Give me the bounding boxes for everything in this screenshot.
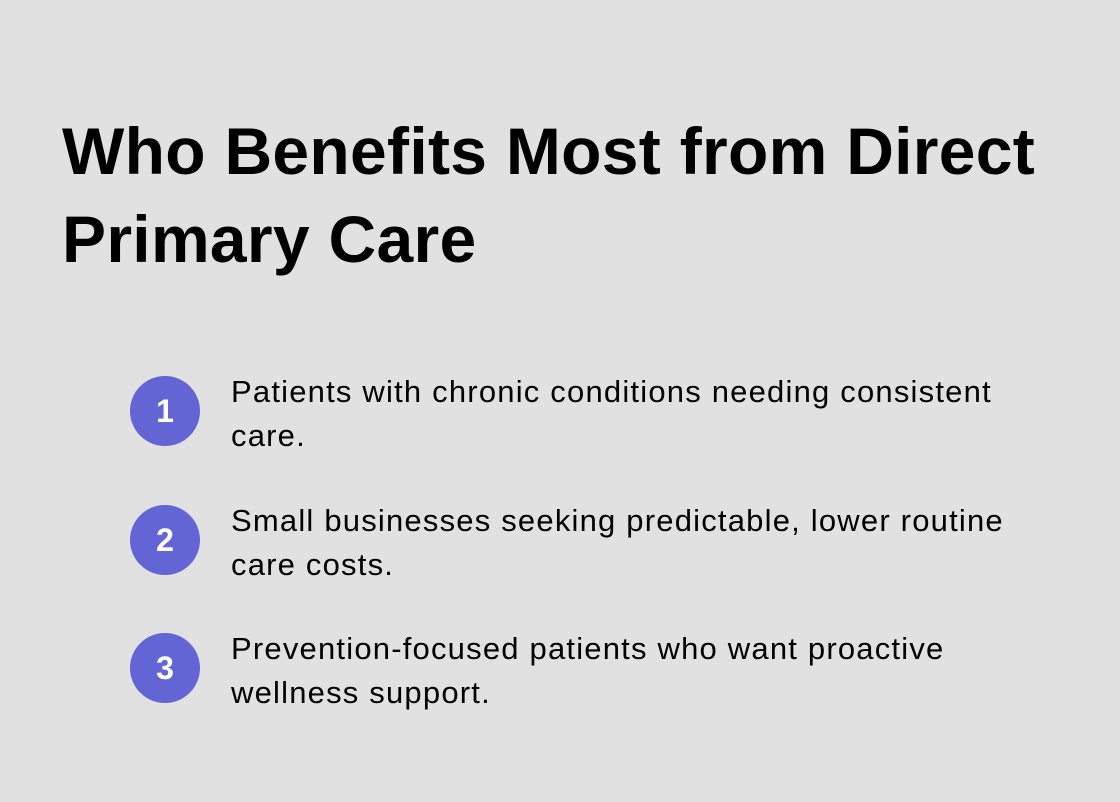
text 2: Small businesses seeking predictable, lower routine	[231, 503, 1004, 538]
title	[62, 114, 1035, 276]
item 1	[130, 374, 992, 453]
text 1: care.	[231, 418, 306, 453]
text 3: wellness support.	[231, 675, 491, 710]
icon: number 3	[130, 633, 200, 703]
item 3	[130, 631, 944, 710]
icon: number 1	[130, 376, 200, 446]
text 3	[231, 631, 944, 710]
icon: number 2: 2	[156, 522, 174, 558]
icon: number 3: 3	[156, 650, 174, 686]
text 1: Patients with chronic conditions needing consistent	[231, 374, 992, 409]
title: Who Benefits Most from Direct	[62, 114, 1035, 188]
text 2: care costs.	[231, 547, 394, 582]
text 3: Prevention-focused patients who want proactive	[231, 631, 944, 666]
text 2	[231, 503, 1004, 582]
item 2	[130, 503, 1004, 582]
icon: number 1: 1	[156, 393, 174, 429]
text 1	[231, 374, 992, 453]
title: Primary Care	[62, 202, 477, 276]
icon: number 2	[130, 505, 200, 575]
